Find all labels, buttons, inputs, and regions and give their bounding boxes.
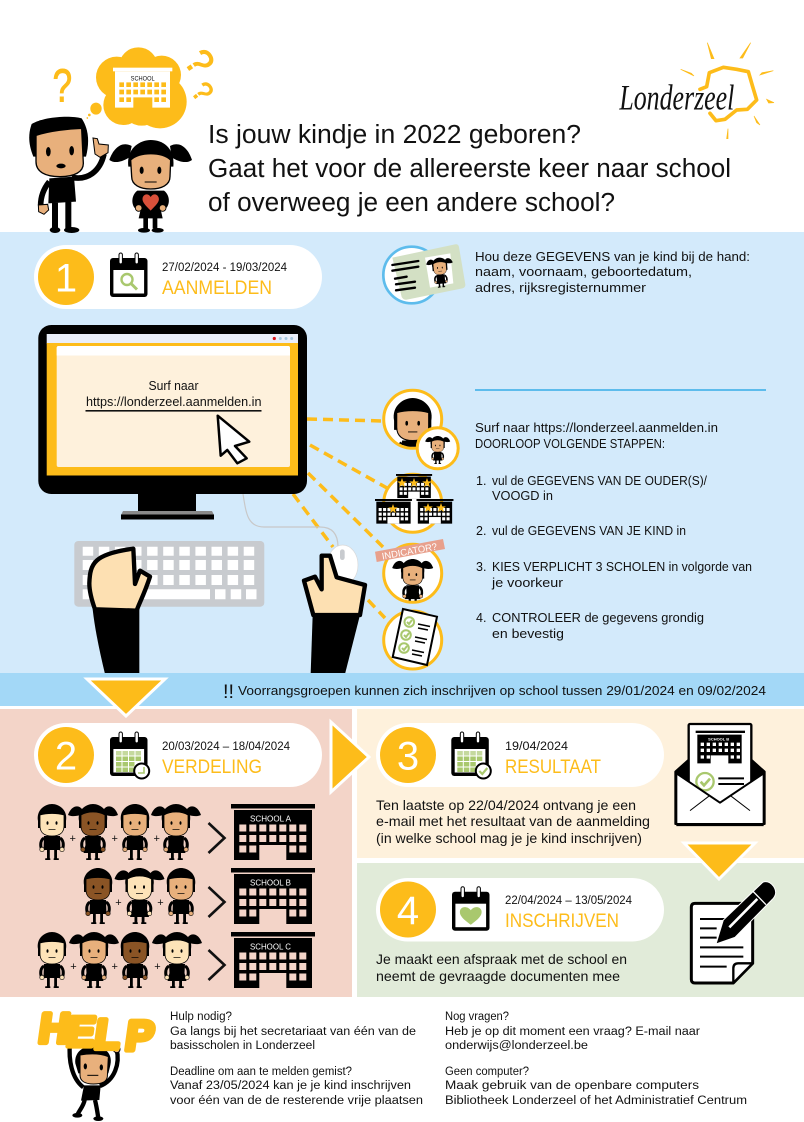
step 1 header pill: 1	[55, 256, 77, 300]
footer: vragen en computer: Geen computer?	[445, 1066, 529, 1078]
step 1 header pill: 27/02/2024 - 19/03/2024	[162, 262, 288, 274]
icon: child with indicator banner: INDICATOR?	[381, 542, 438, 563]
computer monitor	[38, 325, 307, 520]
stap 1: VOOGD in	[492, 489, 553, 503]
stap 4	[476, 611, 704, 641]
illustration: HELP character	[35, 1005, 158, 1121]
icon: question marks: ?	[185, 76, 220, 107]
text: surf naar en stappen	[475, 421, 752, 641]
logo: Londerzeel: Londerzeel	[619, 77, 734, 117]
text: gegevens bij de hand: naam, voornaam, geboortedatum,	[475, 264, 692, 279]
row: children to school B: +	[115, 897, 122, 909]
text: resultaat: e-mail met het resultaat van de aanmelding	[376, 813, 650, 829]
text: inschrijven: neemt de gevraagde documenten mee	[376, 968, 620, 984]
text: gegevens bij de hand	[475, 249, 750, 295]
icon: question marks: ?	[176, 41, 223, 82]
row: children to school C	[38, 932, 315, 988]
footer: hulp en deadline: Deadline om aan te melden gemist?	[170, 1066, 352, 1078]
icon: question marks: ?	[53, 60, 72, 112]
footer: hulp en deadline: basisscholen in Londerzeel	[170, 1040, 315, 1052]
text: surf naar url: https://londerzeel.aanmelden.in	[86, 394, 262, 409]
footer: hulp en deadline: Vanaf 23/05/2024 kan je je kind inschrijven	[170, 1080, 411, 1092]
row: children to school A: +	[69, 833, 76, 845]
icon: question marks	[53, 41, 223, 112]
step 4 header pill: 4	[397, 889, 419, 933]
text: surf naar en stappen: DOORLOOP VOLGENDE STAPPEN:	[475, 437, 665, 451]
step 2 header pill	[34, 723, 322, 787]
title: Is jouw kindje in 2022 geboren?	[208, 121, 581, 149]
icon: thought cloud with school: SCHOOL	[131, 76, 155, 83]
footer: vragen en computer: Heb je op dit moment een vraag? E-mail naar	[445, 1026, 700, 1038]
row: children to school B: +	[157, 897, 164, 909]
icon: parent and child	[384, 390, 458, 472]
stap 1: vul de GEGEVENS VAN DE OUDER(S)/	[492, 474, 707, 488]
step 2 header pill: VERDELING	[162, 757, 262, 778]
stap 4: 4.	[476, 611, 486, 625]
icon: checklist document	[384, 609, 442, 669]
mouse cable	[243, 494, 338, 547]
icon: document with pencil	[691, 882, 776, 983]
text: inschrijven	[376, 951, 627, 984]
hands with sleeves	[89, 549, 365, 674]
footer: vragen en computer: onderwijs@londerzeel.be	[445, 1040, 588, 1052]
title: of overweeg je een andere school?	[208, 189, 615, 217]
mouse	[327, 545, 358, 585]
row: children to school B	[84, 868, 315, 924]
row: children to school A: SCHOOL A	[250, 814, 291, 824]
icon: thought cloud with school	[86, 47, 187, 128]
title: Gaat het voor de allereerste keer naar school	[208, 155, 731, 183]
stap 2: 2.	[476, 524, 486, 538]
step 3 header pill	[376, 723, 664, 787]
icon: envelope with school letter: SCHOOL B	[708, 737, 729, 742]
icon: calendar with clock	[110, 732, 149, 778]
stap 3	[476, 560, 752, 590]
title	[208, 121, 731, 217]
panel: step 4 inschrijven background	[357, 863, 804, 997]
footer: vragen en computer: Nog vragen?	[445, 1011, 509, 1023]
footer: vragen en computer: Bibliotheek Londerzeel of het Administratief Centrum	[445, 1095, 747, 1107]
footer: hulp en deadline: voor één van de de resterende vrije plaatsen	[170, 1095, 423, 1107]
footer: vragen en computer	[445, 1011, 747, 1107]
keyboard	[74, 541, 264, 607]
icon: envelope with school letter	[675, 724, 765, 825]
text: surf naar url: Surf naar	[148, 379, 198, 393]
step 3 header pill: 3	[397, 734, 419, 778]
step 4 header pill: 22/04/2024 – 13/05/2024	[505, 895, 633, 907]
stap 4: CONTROLEER de gegevens grondig	[492, 611, 704, 625]
stap 3: je voorkeur	[491, 576, 563, 590]
stap 3: 3.	[476, 560, 486, 574]
panel: step 1 aanmelden background	[0, 232, 804, 673]
character: father	[29, 117, 108, 233]
text: inschrijven: Je maakt een afspraak met de school en	[376, 951, 627, 967]
stap 2: vul de GEGEVENS VAN JE KIND in	[492, 524, 686, 538]
dashed connector lines	[293, 419, 387, 618]
strip: voorrangsgroepen notice: Voorrangsgroepen kunnen zich inschrijven op school tussen 29/01/2024 en 09/02/2024	[238, 683, 766, 698]
stap 1: 1.	[476, 474, 486, 488]
text: resultaat: (in welke school mag je je kind inschrijven)	[376, 830, 642, 846]
text: gegevens bij de hand: Hou deze GEGEVENS van je kind bij de hand:	[475, 249, 750, 264]
illustration: HELP character: HELP	[35, 1005, 158, 1059]
footer: hulp en deadline: Hulp nodig?	[170, 1011, 232, 1023]
icon: mouse cursor	[218, 416, 249, 463]
row: children to school A: +	[153, 833, 160, 845]
divider line	[475, 389, 766, 391]
row: children to school A: +	[111, 833, 118, 845]
illustration: father with child and thought cloud	[29, 41, 223, 233]
row: children to school C: +	[70, 961, 77, 973]
icon: ID card	[383, 244, 465, 303]
panel: step 3 resultaat background	[357, 709, 804, 858]
step 1 header pill: AANMELDEN	[162, 278, 272, 299]
row: children to school C: +	[154, 961, 161, 973]
row: children to school B: SCHOOL B	[250, 878, 291, 888]
step 1 header pill	[34, 245, 322, 309]
character: girl with heart	[109, 140, 192, 233]
strip: voorrangsgroepen notice	[0, 673, 804, 706]
text: gegevens bij de hand: adres, rijksregisternummer	[475, 280, 647, 295]
icon: child with indicator banner	[375, 539, 445, 605]
arrow: down to step 2	[87, 679, 165, 716]
panel: step 2 verdeling background	[0, 709, 352, 997]
strip: voorrangsgroepen notice: !!	[223, 682, 234, 703]
arrow: down to step 4	[684, 843, 755, 879]
footer: hulp en deadline	[170, 1011, 423, 1107]
step 4 header pill	[376, 878, 664, 942]
step 2 header pill: 20/03/2024 – 18/04/2024	[162, 741, 291, 753]
row: children to school A	[38, 804, 315, 860]
row: children to school C: +	[111, 961, 118, 973]
footer: vragen en computer: Maak gebruik van de openbare computers	[445, 1080, 699, 1092]
icon: calendar with check	[451, 732, 491, 778]
logo: Londerzeel	[619, 43, 774, 139]
stap 1	[476, 474, 707, 503]
icon: calendar with magnifier	[110, 253, 148, 297]
footer: hulp en deadline: Ga langs bij het secretariaat van één van de	[170, 1026, 416, 1038]
icon: three schools with stars	[375, 474, 453, 532]
step 4 header pill: INSCHRIJVEN	[505, 911, 619, 932]
stap 3: KIES VERPLICHT 3 SCHOLEN in volgorde van	[492, 560, 752, 574]
text: resultaat: Ten laatste op 22/04/2024 ontvang je een	[376, 797, 636, 813]
icon: calendar with heart	[452, 887, 490, 931]
text: surf naar en stappen: Surf naar https://londerzeel.aanmelden.in	[475, 421, 718, 435]
text: resultaat	[376, 797, 650, 846]
stap 4: en bevestig	[492, 627, 564, 641]
step 3 header pill: RESULTAAT	[505, 757, 601, 778]
arrow: right to step 3	[331, 722, 369, 792]
text: surf naar url	[86, 379, 262, 412]
step 3 header pill: 19/04/2024	[505, 741, 569, 753]
step 2 header pill: 2	[55, 734, 77, 778]
row: children to school C: SCHOOL C	[250, 942, 291, 952]
